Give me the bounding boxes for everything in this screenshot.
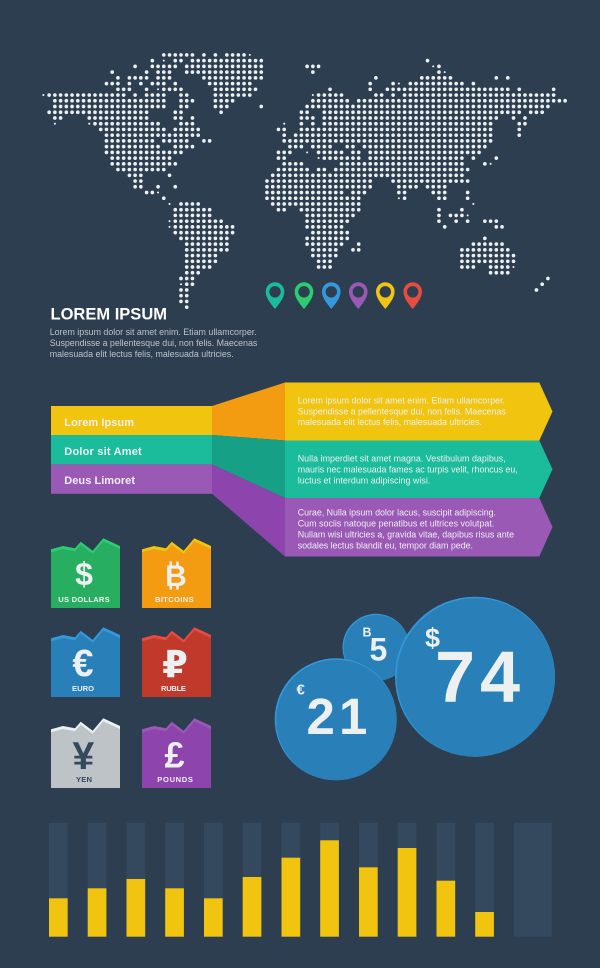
title: LOREM IPSUM [50,305,167,323]
currency cards [51,538,211,788]
arrow panel: purple text: sodales lectus blandit eu, tempor diam pede. [298,541,473,551]
card: ruble [142,627,211,697]
bubble: bitcoin 5: B [362,625,372,639]
card: ruble: ₽ [162,643,188,686]
pin: green [295,282,313,309]
card: bitcoins: BITCOINS [155,595,194,604]
card: us dollars: $ [75,556,93,592]
bar tracks [49,823,552,937]
intro text block [50,327,258,359]
dotted world map [43,55,565,307]
arrow panel: purple text: Nullam wisi ultricies a, gravida vitae, dapibus risus ante [298,530,514,540]
arrow panel: yellow text: Lorem ipsum dolor sit amet enim. Etiam ullamcorper. [298,395,505,405]
left band: yellow label [51,406,212,435]
card: ruble: RUBLE [161,684,186,693]
card: euro: € [72,643,94,685]
pin: purple [349,282,368,309]
intro text block: malesuada elit lectus felis, malesuada ultricies. [50,349,234,359]
bubble: bitcoin 5: 5 [370,632,387,668]
left band: teal label: Dolor sit Amet [64,446,142,458]
connector: dark purple [212,464,285,556]
pin: red [403,282,422,309]
bubble: euro 21 [275,658,397,780]
arrow panel: teal text [285,440,552,498]
bubble: dollar 74: $ [425,623,440,653]
bubble: bitcoin 5 [342,614,410,681]
arrow panel: yellow text [285,382,552,440]
card: euro: EURO [72,684,94,693]
intro text block: Suspendisse a pellentesque dui, non felis. Maecenas [50,338,258,348]
arrow panel: purple text: Curae, Nulla ipsum dolor lacus, suscipit adipiscing. [298,508,496,518]
left band: purple label [51,464,212,494]
connector: dark teal [212,435,285,498]
bubble chart [275,597,555,780]
bubble: dollar 74: 74 [435,638,520,718]
card: euro [51,627,120,697]
bar chart [49,823,552,937]
arrow panel: teal text: mauris nec malesuada fames ac turpis velit, rhoncus eu, [298,464,518,474]
connector: orange [212,382,285,440]
pin: yellow [376,282,395,309]
left band: yellow label: Lorem Ipsum [64,417,134,429]
left band: teal label [51,435,212,464]
card: us dollars: US DOLLARS [58,595,110,604]
arrow panel: teal text: Nulla imperdiet sit amet magna. Vestibulum dapibus, [298,453,506,463]
card: bitcoins [142,538,211,608]
arrow panel: yellow text: malesuada elit lectus felis, malesuada ultricies. [298,417,482,427]
card: yen: YEN [76,775,92,784]
card: pounds: POUNDS [157,775,193,784]
bubble: euro 21: 21 [306,688,367,745]
card: pounds [142,718,211,788]
location pins [266,282,422,309]
bubble: dollar 74 [395,597,555,757]
card: yen [51,718,120,788]
card: pounds: £ [164,734,185,776]
bar values [49,840,494,937]
card: yen: ¥ [72,735,94,778]
arrow panel: yellow text: Suspendisse a pellentesque dui, non felis. Maecenas [298,406,506,416]
pin: blue [322,282,341,309]
pin: teal [266,282,284,309]
intro text block: Lorem ipsum dolor sit amet enim. Etiam ullamcorper. [50,327,257,337]
bubble: euro 21: € [296,682,306,698]
arrow panel: purple text: Cum sociis natoque penatibus et ultrices volutpat. [298,519,494,529]
left band: purple label: Deus Limoret [64,475,135,487]
arrow panel: purple text [285,498,552,556]
arrow panel: teal text: luctus et interdum adipiscing wisi. [298,475,430,485]
card: us dollars [51,538,120,608]
ribbon funnel panel [51,382,552,556]
card: bitcoins: B [165,560,187,593]
